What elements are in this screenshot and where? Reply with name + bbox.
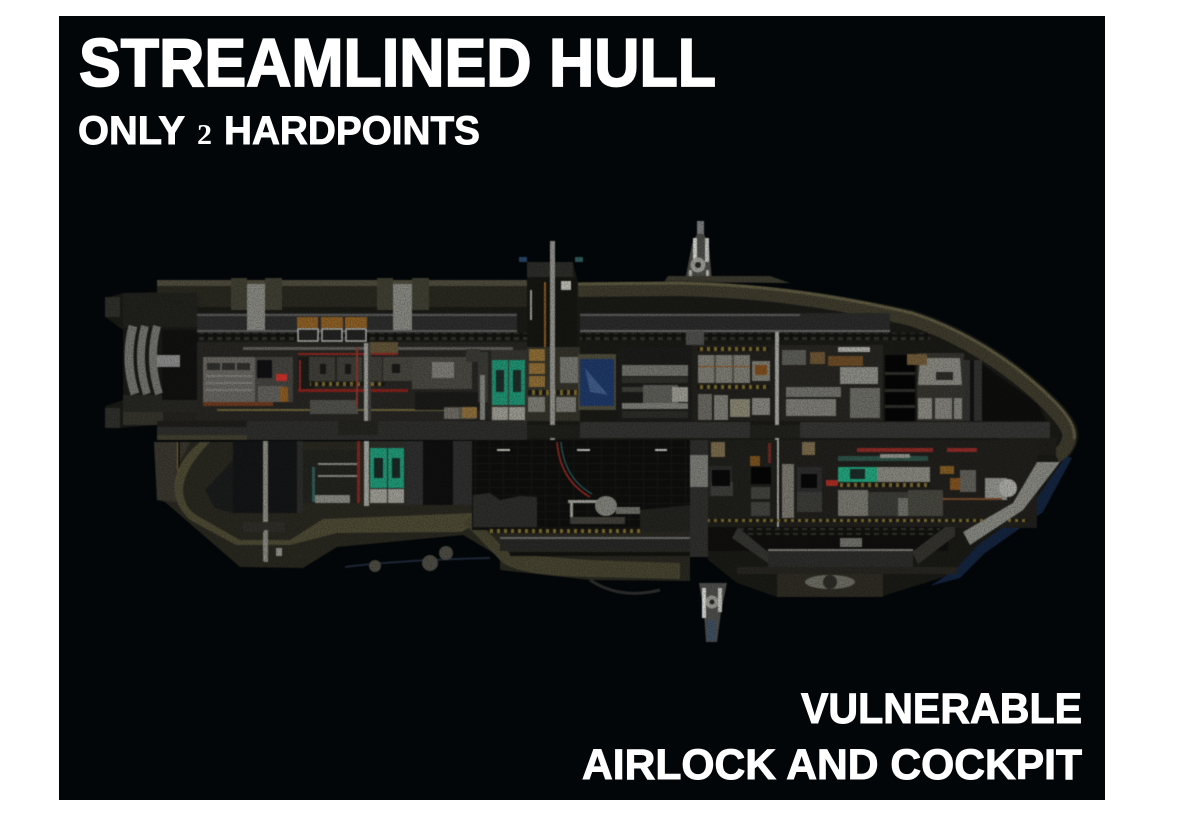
deck: keel and lower bands [708, 527, 957, 597]
deck: main floor bands [157, 421, 1056, 455]
hull: silver cockpit plating [963, 462, 1060, 545]
deck: forward lower compartments [690, 440, 1037, 557]
callout: vulnerable airlock and cockpit [582, 685, 1082, 789]
subtitle: HARDPOINTS [224, 109, 480, 153]
hardpoint: top weapon mount [664, 221, 790, 283]
thrusters: ventral pods [345, 546, 660, 593]
hangar: lower central bay [472, 440, 690, 556]
green panels: upper deck [491, 350, 527, 421]
deck: lower left compartments [205, 441, 472, 561]
hull: blue nose plating [930, 456, 1072, 586]
subtitle: 2 [197, 119, 212, 151]
illustration: spaceship cross-section [105, 221, 1079, 642]
panel: blue hatch [578, 354, 616, 410]
title: STREAMLINED HULL [79, 25, 716, 101]
crates: three orange containers [297, 317, 367, 341]
tower: central mast and ladder [519, 241, 583, 532]
callout: vulnerable airlock and cockpit: VULNERABLE [801, 685, 1082, 733]
hull: main body outline [105, 262, 1079, 597]
subtitle: ONLY [78, 109, 185, 153]
tanks: upper storage [618, 347, 692, 421]
hull: aft strut [264, 530, 282, 562]
hull: upper left armor band [140, 278, 527, 330]
mast: forward vertical strut [775, 332, 779, 550]
deck: forward upper compartments [780, 345, 1046, 421]
hull: upper corridor stripes [197, 313, 930, 345]
crates: grey cargo bay [692, 345, 777, 421]
subtitle [78, 109, 480, 153]
hull: right curved armor band [578, 283, 1074, 456]
hull: engine block left [105, 293, 467, 428]
callout: vulnerable airlock and cockpit: AIRLOCK AND COCKPIT [582, 741, 1082, 789]
hardpoint: bottom weapon mount [699, 583, 727, 642]
hull: lower left tail section [154, 440, 690, 581]
deck: upper left compartments [197, 342, 527, 421]
emblem: hull eye [805, 575, 855, 589]
